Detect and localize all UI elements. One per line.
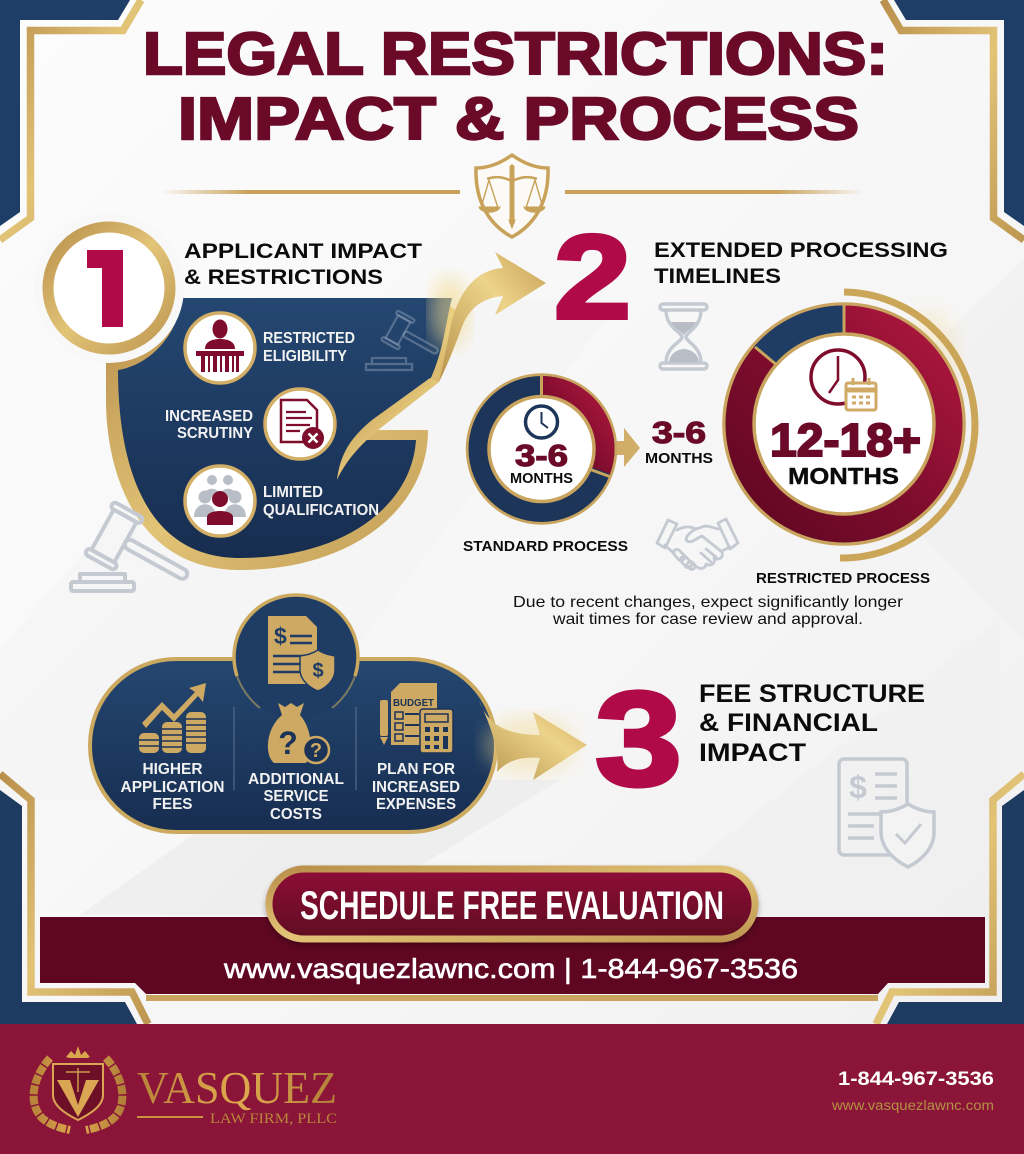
contact line: www.vasquezlawnc.com | 1-844-967-3536 [223, 953, 798, 984]
divider left [160, 190, 460, 194]
item: restricted eligibility [185, 313, 355, 383]
number ring 1: 1 [81, 241, 155, 348]
heading: extended processing timelines: EXTENDED PROCESSING [654, 239, 948, 262]
title [143, 21, 888, 152]
label: restricted process: RESTRICTED PROCESS [756, 570, 930, 587]
item: additional service costs: COSTS [270, 806, 322, 823]
heading: applicant impact: APPLICANT IMPACT [184, 240, 422, 263]
text block: note: wait times for case review and approval. [552, 611, 863, 628]
item: restricted eligibility: ELIGIBILITY [263, 348, 348, 365]
number ring 1 [42, 222, 184, 363]
section 2 number: 2 [554, 211, 631, 344]
icon: grey gavel [71, 502, 201, 602]
frame: top-right corner [883, 0, 1024, 240]
item: restricted eligibility: RESTRICTED [263, 330, 355, 347]
chart: restricted process donut: MONTHS [788, 463, 899, 489]
icon: clock and calendar [811, 350, 876, 410]
gold swoosh sliver [337, 378, 439, 480]
item: additional service costs [248, 703, 344, 823]
navy blob fill [118, 298, 452, 558]
item: additional service costs: ADDITIONAL [248, 771, 344, 788]
heading: applicant impact [184, 240, 422, 289]
logo: wordmark: LAW FIRM, PLLC [210, 1111, 337, 1127]
icon: grey document and shield: $ [849, 769, 867, 805]
frame: bottom-right corner [876, 774, 1024, 1024]
icon: document with dollar shield: $ [312, 660, 324, 682]
heading: fee structure: IMPACT [699, 739, 806, 767]
footer phone: 1-844-967-3536 [838, 1069, 994, 1090]
divider right [565, 190, 865, 194]
cta button: SCHEDULE FREE EVALUATION [300, 884, 724, 928]
item: higher application fees [120, 683, 224, 813]
item: increased scrutiny [165, 389, 335, 459]
icon: handshake [657, 519, 738, 569]
frame: top-left corner [0, 0, 141, 240]
item: plan for increased expenses: EXPENSES [376, 796, 456, 813]
item: additional service costs: ? [310, 740, 322, 762]
gold arrow to section 3 [479, 700, 587, 780]
item: higher application fees: FEES [152, 796, 192, 813]
icon: small clock [526, 406, 558, 438]
item: increased scrutiny: INCREASED [165, 408, 253, 425]
label: standard process: STANDARD PROCESS [463, 538, 628, 555]
item: plan for increased expenses: PLAN FOR [377, 761, 455, 778]
chart: standard process donut: MONTHS [510, 471, 573, 487]
chart: restricted process donut [724, 292, 975, 558]
chart: restricted process donut: 12-18+ [770, 414, 921, 466]
heading: fee structure: FEE STRUCTURE [699, 680, 925, 708]
item: higher application fees: APPLICATION [120, 779, 224, 796]
item: limited qualification [185, 466, 379, 536]
logo: wordmark: VASQUEZ [137, 1062, 337, 1113]
item: increased scrutiny: SCRUTINY [177, 425, 254, 442]
title: IMPACT & PROCESS [178, 86, 859, 152]
cta button [269, 869, 755, 939]
heading: fee structure [699, 680, 925, 767]
chart: standard process donut [468, 375, 616, 523]
frame: bottom-left corner [0, 774, 148, 1024]
arrow between donuts [617, 428, 640, 467]
section 3 number: 3 [595, 665, 682, 814]
item: limited qualification: LIMITED [263, 484, 323, 501]
item: limited qualification: QUALIFICATION [263, 502, 379, 519]
icon: grey document and shield [839, 759, 934, 867]
chart: standard process donut: 3-6 [515, 438, 568, 473]
icon: hourglass [660, 304, 707, 369]
item: plan for increased expenses: BUDGET [393, 698, 434, 709]
item: plan for increased expenses [372, 683, 460, 813]
footer [0, 1024, 1024, 1154]
item: additional service costs: SERVICE [264, 788, 328, 805]
heading: applicant impact: & RESTRICTIONS [184, 266, 383, 289]
icon: shield with sword and scales [476, 155, 548, 237]
label: middle 3-6 months [645, 415, 713, 467]
pill and top circle [90, 595, 496, 832]
title: LEGAL RESTRICTIONS: [143, 21, 888, 87]
text block: note [513, 594, 904, 628]
banner [40, 869, 985, 1001]
logo: crest [34, 1046, 122, 1130]
icon: faint gavel in panel [366, 310, 446, 370]
gold blob outline [106, 298, 458, 570]
item: additional service costs: ? [278, 725, 298, 761]
text block: note: Due to recent changes, expect significantly longer [513, 594, 904, 611]
icon: document with dollar shield [268, 616, 335, 691]
item: plan for increased expenses: INCREASED [372, 779, 460, 796]
heading: extended processing timelines [654, 239, 948, 288]
panel: section 3 fees [90, 595, 587, 832]
footer website: www.vasquezlawnc.com [831, 1098, 994, 1113]
panel: section 1 applicant impact [34, 213, 546, 570]
label: middle 3-6 months: 3-6 [652, 415, 706, 450]
label: middle 3-6 months: MONTHS [645, 450, 713, 467]
icon: document with dollar shield: $ [274, 623, 287, 649]
item: higher application fees: HIGHER [142, 761, 202, 778]
gold curved arrow [430, 252, 546, 382]
heading: fee structure: & FINANCIAL [699, 709, 878, 737]
heading: extended processing timelines: TIMELINES [654, 265, 781, 288]
